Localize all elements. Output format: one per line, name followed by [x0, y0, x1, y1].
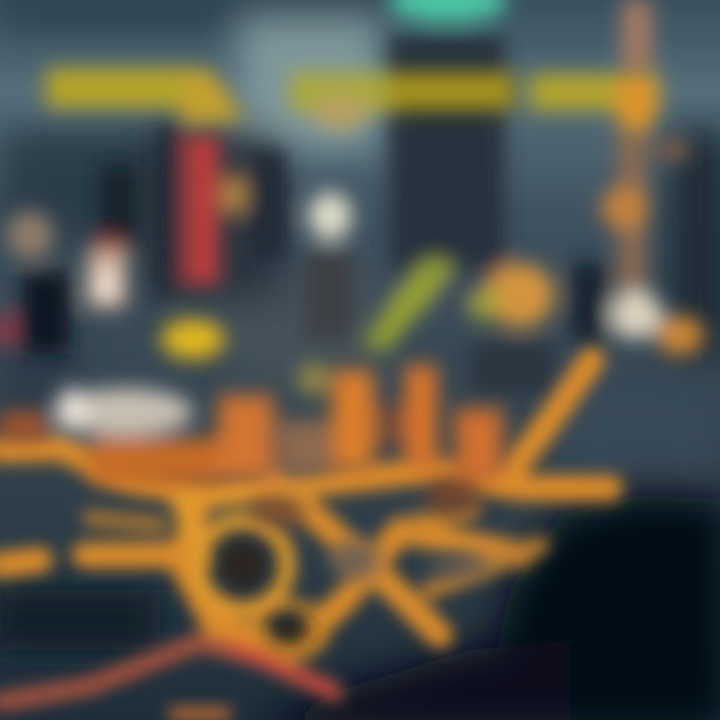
orange cluster [486, 263, 554, 327]
lower dark ground [0, 495, 720, 720]
white light tower [88, 248, 126, 308]
white glow center [308, 192, 352, 240]
tan glow far left [6, 211, 54, 259]
orange right spire [622, 0, 652, 70]
red spot left edge [0, 312, 13, 348]
title bars [46, 68, 660, 134]
dark block center right [470, 342, 555, 394]
dark towers [100, 165, 136, 250]
skyline buildings [0, 0, 704, 394]
network lines [0, 360, 610, 650]
white glow and orange base right [610, 291, 662, 339]
amber light by red tower [222, 173, 246, 217]
red tower [184, 135, 220, 285]
glowing orange network [0, 360, 610, 714]
teal tower top [388, 0, 508, 22]
red lower line [0, 642, 335, 702]
yellow oval sign [161, 319, 225, 359]
network node holes [219, 541, 267, 589]
ring accents [199, 521, 287, 609]
tall dark tower [390, 35, 505, 270]
dark block left [22, 272, 70, 354]
white dome [57, 388, 193, 436]
orange building cluster [0, 365, 503, 644]
background haze [0, 0, 720, 470]
green diagonal streak [362, 258, 455, 352]
